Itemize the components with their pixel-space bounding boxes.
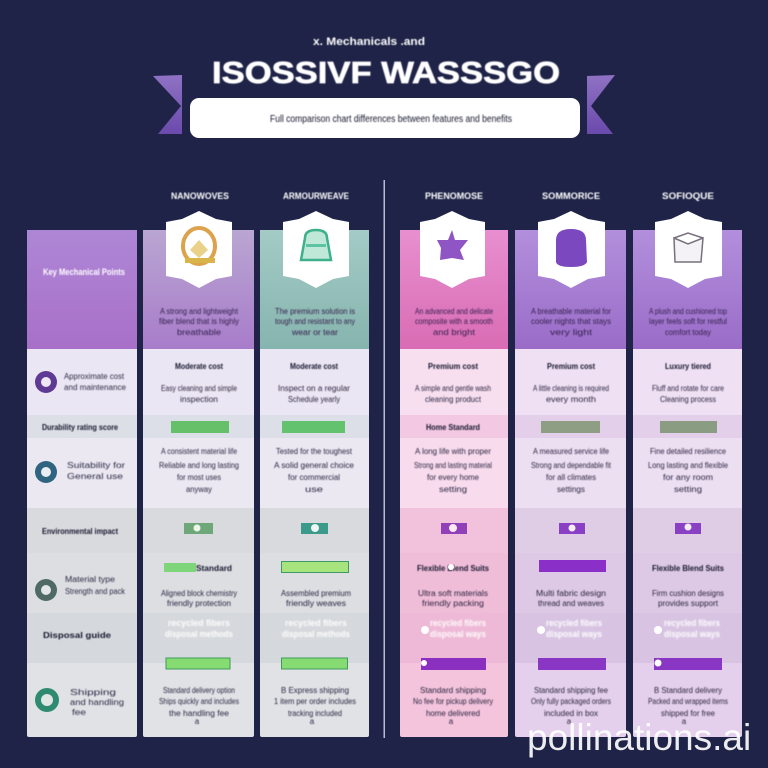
- text label: [652, 564, 725, 608]
- row label 7: fee: [72, 708, 87, 717]
- row texts: Tested for the toughest: [276, 447, 353, 456]
- row texts: use: [305, 485, 324, 494]
- purple bar: [421, 658, 486, 670]
- header text: An advanced and delicate: [415, 307, 493, 316]
- text label: Firm cushion designs: [652, 589, 724, 598]
- text with dot: Ultra soft materials: [418, 589, 488, 598]
- purple chip: [675, 523, 701, 534]
- row label 1: Approximate cost: [64, 372, 125, 381]
- text: [281, 589, 351, 608]
- text label: provides support: [658, 599, 719, 608]
- row texts: Luxury tiered: [665, 362, 711, 371]
- blurred text: disposal ways: [664, 629, 720, 639]
- purple bar: [539, 560, 606, 572]
- column heading: ARMOURWEAVE: [283, 191, 349, 201]
- purple chip: [559, 523, 585, 534]
- row texts: A little cleaning is required: [533, 384, 609, 393]
- header text: A breathable material for: [531, 307, 611, 316]
- header text: very light: [550, 328, 593, 337]
- row texts: [531, 362, 612, 494]
- row label 5: Material type: [65, 575, 116, 584]
- purple bar: [538, 658, 606, 670]
- bottom text: [531, 686, 611, 726]
- header text: fiber blend that is highly: [159, 317, 239, 326]
- icon: grey-green circle: [35, 579, 57, 601]
- row texts: Long lasting and flexible: [648, 461, 729, 470]
- text: thread and weaves: [538, 599, 604, 608]
- green bar: [282, 658, 348, 669]
- row texts: for commercial: [288, 473, 340, 482]
- badge with pillow icon: [655, 211, 722, 288]
- header text: The premium solution is: [275, 307, 355, 316]
- bottom text: [413, 686, 493, 726]
- title: ISOSSIVF WASSSGO: [212, 55, 560, 90]
- header text: wear or tear: [291, 328, 338, 337]
- ribbon banner with subtitle: Full comparison chart differences between features and benefits: [270, 114, 512, 125]
- green bar: [282, 562, 348, 572]
- ribbon banner with subtitle: [153, 75, 615, 138]
- blurred text: disposal ways: [546, 629, 602, 639]
- purple bar: [654, 658, 722, 670]
- blurred text: [654, 618, 720, 639]
- row texts: setting: [674, 485, 702, 494]
- header text: tough and resistant to any: [275, 317, 355, 326]
- row texts: cleaning product: [425, 395, 482, 404]
- row label 7: Shipping: [70, 688, 116, 697]
- bottom text: [648, 686, 728, 726]
- bottom text: Only fully packaged orders: [531, 697, 611, 706]
- row label 2: Durability rating score: [42, 423, 118, 432]
- row texts: Schedule yearly: [288, 395, 340, 404]
- text: Assembled premium: [281, 589, 351, 598]
- panel: column 3: [400, 191, 508, 737]
- panel: column 4: [515, 191, 626, 737]
- bottom text: shipped for free: [661, 709, 716, 718]
- bottom text: a: [195, 717, 200, 726]
- row label 3: General use: [67, 472, 124, 481]
- bottom text: Ships quickly and includes: [159, 697, 239, 706]
- purple chip: [441, 523, 467, 534]
- overline text: x. Mechanicals .and: [313, 36, 425, 48]
- row texts: for most uses: [177, 473, 221, 482]
- row texts: for any room: [663, 473, 713, 482]
- row label 5: Strength and pack: [65, 587, 126, 596]
- row texts: Easy cleaning and simple: [161, 384, 237, 393]
- bottom text: home delivered: [426, 709, 480, 718]
- row texts: A long life with proper: [415, 447, 491, 456]
- text with dot: Flexible Blend Suits: [417, 564, 490, 573]
- row texts: Premium cost: [428, 362, 478, 371]
- row label 1: [64, 372, 127, 392]
- column heading: PHENOMOSE: [425, 191, 483, 201]
- bottom text: [274, 686, 356, 726]
- row texts: A simple and gentle wash: [415, 384, 491, 393]
- row label 7: and handling: [70, 698, 124, 707]
- green bar: [171, 421, 229, 433]
- row label 5: [65, 575, 126, 596]
- bottom text: a: [310, 717, 315, 726]
- watermark: pollinations.ai: [527, 717, 751, 758]
- bottom text: B Express shipping: [281, 686, 349, 695]
- text: Multi fabric design: [536, 589, 606, 598]
- bottom text: Standard shipping: [420, 686, 486, 695]
- header text: [415, 307, 493, 337]
- header text: comfort today: [665, 328, 711, 337]
- header text: A strong and lightweight: [160, 307, 239, 316]
- blurred text: recycled fibers: [168, 618, 230, 628]
- icon: purple circle: [35, 371, 57, 393]
- bottom text: Standard delivery option: [163, 686, 235, 695]
- row label 1: and maintenance: [64, 383, 127, 392]
- blurred text: [421, 618, 486, 639]
- blurred text: recycled fibers: [430, 618, 486, 628]
- row texts: A measured service life: [533, 447, 610, 456]
- icon: green circle: [35, 688, 59, 712]
- row texts: Cleaning process: [660, 395, 716, 404]
- row label 7: [70, 688, 124, 717]
- row texts: [648, 362, 729, 494]
- bottom text: No fee for pickup delivery: [413, 697, 493, 706]
- bottom text: Standard shipping fee: [534, 686, 609, 695]
- row texts: anyway: [186, 485, 212, 494]
- row label 3: Suitability for: [67, 461, 125, 470]
- center divider: [384, 180, 385, 738]
- blurred text: recycled fibers: [546, 618, 602, 628]
- panel: column 1: [143, 191, 254, 737]
- row texts: Fluff and rotate for care: [652, 384, 724, 393]
- row texts: setting: [439, 485, 467, 494]
- bottom text: Packed and wrapped items: [648, 697, 728, 706]
- row texts: A solid general choice: [274, 461, 355, 470]
- green bar: [282, 421, 345, 433]
- blurred text: disposal methods: [282, 629, 350, 639]
- bottom text: tracking included: [288, 709, 342, 718]
- header text: layer feels soft for restful: [649, 317, 727, 326]
- column heading: NANOWOVES: [171, 191, 229, 201]
- bottom text: included in box: [544, 709, 598, 718]
- blurred text: disposal methods: [165, 629, 233, 639]
- row texts: [414, 362, 492, 494]
- row texts: [159, 362, 239, 494]
- row label 6: Disposal guide: [43, 631, 112, 640]
- text label: Flexible Blend Suits: [652, 564, 725, 573]
- panel: column 5: [633, 191, 742, 737]
- icon: blue circle: [35, 461, 57, 483]
- badge with gold icon: [166, 211, 232, 288]
- header text: A plush and cushioned top: [649, 307, 727, 316]
- text: friendly weaves: [286, 599, 346, 608]
- panel: column 2: [260, 191, 369, 737]
- bar label: Home Standard: [426, 423, 480, 432]
- bottom text: a: [682, 717, 687, 726]
- blurred text: recycled fibers: [664, 618, 720, 628]
- row texts: settings: [557, 485, 585, 494]
- column heading: SOFIOQUE: [662, 191, 714, 201]
- row texts: Strong and lasting material: [414, 461, 492, 470]
- header label: Key Mechanical Points: [43, 267, 125, 277]
- header text: and bright: [433, 328, 476, 337]
- panel: label column: [27, 230, 137, 737]
- header text: [649, 307, 727, 337]
- badge with star icon: [420, 211, 485, 288]
- badge with purple icon: [538, 211, 605, 288]
- bar with text: friendly protection: [167, 599, 231, 608]
- row texts: Inspect on a regular: [278, 384, 350, 393]
- grey-green bar: [660, 421, 717, 433]
- row texts: Premium cost: [547, 362, 595, 371]
- blurred text: [282, 618, 350, 639]
- row texts: Strong and dependable fit: [531, 461, 612, 470]
- header text: [531, 307, 611, 337]
- blurred text: disposal ways: [430, 629, 486, 639]
- row texts: Moderate cost: [175, 362, 223, 371]
- row texts: every month: [546, 395, 596, 404]
- row texts: inspection: [180, 395, 218, 404]
- header text: breathable: [177, 328, 222, 337]
- green bar: [166, 658, 230, 669]
- row texts: Fine detailed resilience: [650, 447, 727, 456]
- text: [536, 589, 606, 608]
- text with dot: [417, 564, 490, 608]
- badge with green icon: [283, 211, 349, 288]
- grey-green bar: [541, 421, 600, 433]
- bar with text: Standard: [196, 564, 232, 573]
- bottom text: a: [567, 717, 572, 726]
- blurred text: [165, 618, 233, 639]
- row texts: Reliable and long lasting: [159, 461, 239, 470]
- header text: composite with a smooth: [415, 317, 493, 326]
- row label 4: Environmental impact: [42, 527, 118, 536]
- bottom text: 1 item per order includes: [274, 697, 356, 706]
- row texts: A consistent material life: [161, 447, 237, 456]
- header text: [159, 307, 239, 337]
- bottom text: [159, 686, 239, 726]
- blurred text: recycled fibers: [285, 618, 347, 628]
- text with dot: friendly packing: [422, 599, 484, 608]
- row texts: Moderate cost: [290, 362, 338, 371]
- header text: cooler nights that stays: [531, 317, 611, 326]
- bottom text: a: [449, 717, 454, 726]
- row texts: for all climates: [546, 473, 596, 482]
- row label 3: [67, 461, 125, 481]
- blurred text: [537, 618, 602, 639]
- header text: [275, 307, 355, 337]
- bottom text: the handling fee: [169, 709, 230, 718]
- column heading: SOMMORICE: [542, 191, 600, 201]
- bar with text: Aligned block chemistry: [161, 589, 237, 598]
- row texts: for every home: [427, 473, 480, 482]
- teal chip: [301, 523, 328, 534]
- row texts: [274, 362, 355, 494]
- bottom text: B Standard delivery: [654, 686, 722, 695]
- green chip: [184, 523, 213, 534]
- bar with text: [161, 563, 237, 608]
